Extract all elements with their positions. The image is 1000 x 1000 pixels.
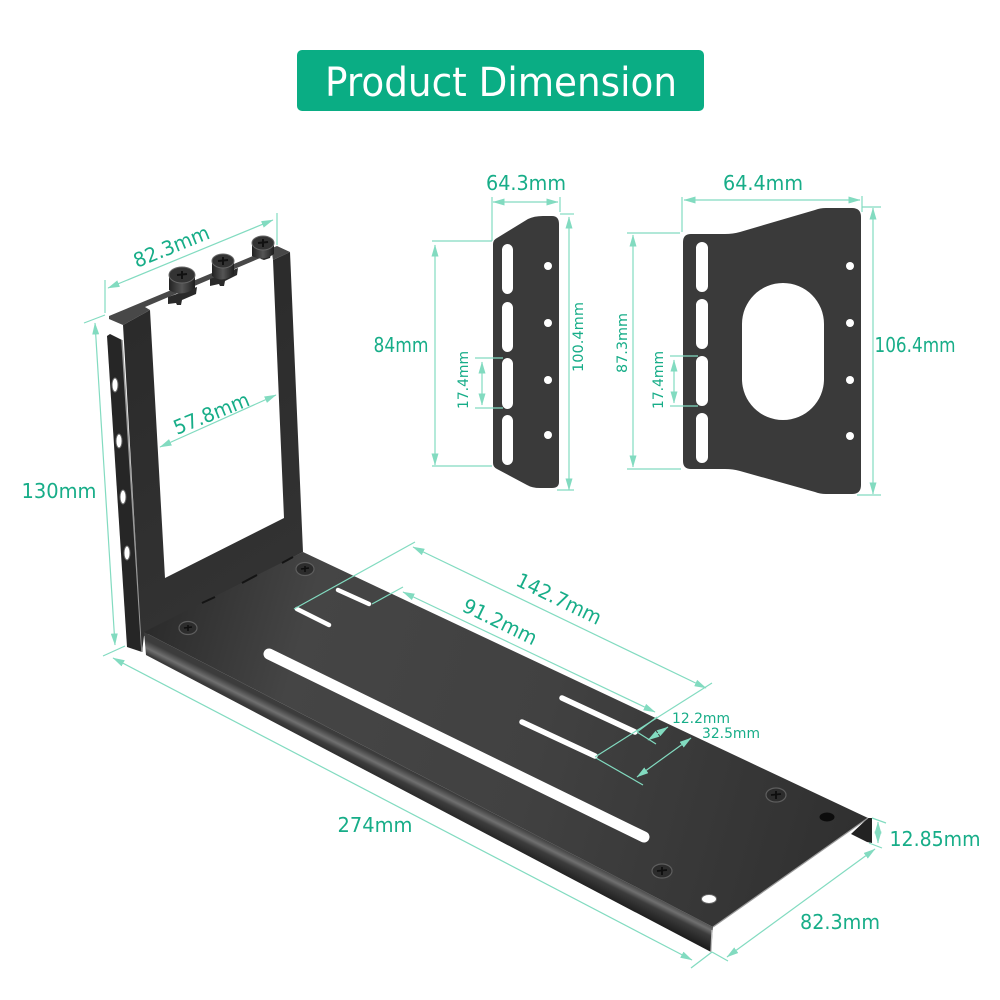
side flange with holes — [107, 334, 142, 652]
label: slot outer length: 142.7mm — [512, 568, 606, 630]
label: slot spacing: 32.5mm — [702, 726, 760, 742]
label: plate B width: 64.4mm — [723, 171, 803, 195]
mounting holes — [702, 812, 834, 904]
screws — [179, 562, 786, 878]
label: plate B height: 106.4mm — [874, 333, 956, 357]
label: plate B slot span: 87.3mm — [615, 313, 631, 373]
side plate A — [493, 216, 559, 488]
far-end folded lip — [851, 818, 872, 843]
label: window width: 57.8mm — [170, 387, 253, 440]
seam notches — [202, 557, 293, 603]
base plate — [144, 552, 872, 952]
label: frame width: 82.3mm — [130, 220, 213, 273]
front folded lip — [144, 632, 713, 952]
top flange — [109, 246, 290, 325]
label: plate A slot span: 84mm — [374, 333, 428, 357]
dimension lines — [84, 196, 886, 968]
vertical bracket — [107, 236, 303, 652]
label: base width: 82.3mm — [800, 910, 880, 934]
label: slot inner length: 91.2mm — [459, 593, 541, 650]
title banner — [297, 50, 704, 111]
label: lip height: 12.85mm — [890, 827, 980, 851]
label: plate A slot pitch: 17.4mm — [456, 351, 472, 409]
title banner: Product Dimension — [325, 60, 677, 106]
label: plate B slot pitch: 17.4mm — [651, 351, 667, 409]
label: height: 130mm — [22, 479, 96, 503]
label: plate A width: 64.3mm — [486, 171, 566, 195]
label: plate A height: 100.4mm — [571, 302, 587, 372]
front panel with window — [123, 252, 303, 652]
side plate B — [683, 208, 861, 494]
label: base length: 274mm — [338, 813, 412, 837]
mounting slots — [269, 590, 644, 837]
thumb screws — [168, 236, 274, 305]
label: slot width: 12.2mm — [672, 711, 730, 727]
top surface — [144, 552, 868, 927]
